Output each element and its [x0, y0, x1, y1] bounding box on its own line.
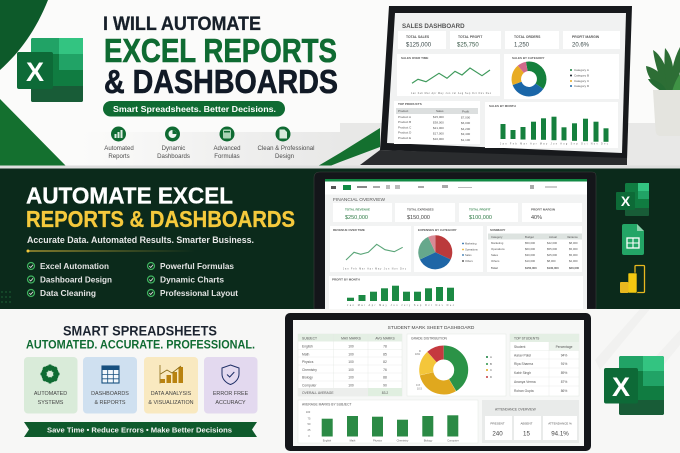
stat: absent: ABSENT — [520, 422, 533, 426]
icon: Excel small: X — [621, 193, 631, 209]
table: summary: $10,000 — [525, 259, 536, 263]
line chart: revenue over time: REVENUE OVER TIME — [333, 228, 365, 232]
feature: dynamic dashboards — [157, 126, 190, 160]
table: summary: Marketing — [491, 241, 504, 245]
icon: gear — [40, 364, 60, 384]
card: data analysis and visualization: DATA ANALYSIS — [151, 391, 192, 397]
icon: Power BI — [620, 266, 644, 293]
table: subject marks: 90 — [383, 384, 387, 388]
donut chart: grade distribution: 10.5 — [417, 388, 422, 390]
icon: Excel logo: X — [26, 57, 44, 87]
table: top products: Product A — [398, 115, 411, 119]
donut chart: grade distribution: D — [419, 350, 421, 353]
KPI: total expenses: $150,000 — [407, 215, 430, 221]
table: subject marks: 100 — [348, 376, 354, 380]
heading: Excel reports: EXCEL REPORTS — [104, 32, 337, 69]
table: top students — [510, 334, 579, 396]
table: top students: Kabir Singh — [514, 371, 531, 375]
table: summary: $30,000 — [525, 253, 536, 257]
table: subject marks: OVERALL AVERAGE — [302, 391, 334, 395]
KPI: profit margin: 20.6% — [572, 42, 590, 48]
table: summary: Variance — [567, 235, 578, 239]
card: automated systems — [24, 357, 78, 414]
bar chart: profit by month: PROFIT BY MONTH — [332, 278, 360, 282]
icon: Excel large — [604, 356, 664, 415]
table: top products: Product — [398, 109, 409, 113]
table: top products: $17,000 — [433, 132, 444, 136]
KPI: total revenue: $250,000 — [345, 215, 368, 221]
table: summary: $60,000 — [525, 247, 536, 251]
table: subject marks: Computer — [302, 384, 317, 388]
card: dashboards and reports — [83, 357, 137, 414]
KPI: total sales — [398, 31, 446, 49]
KPI: profit margin: PROFIT MARGIN — [531, 208, 555, 212]
stat: present — [485, 416, 512, 440]
KPI: total orders: 1,250 — [514, 42, 530, 48]
stat: attendance percentage — [543, 416, 577, 440]
stat: attendance percentage: ATTENDANCE % — [548, 422, 572, 426]
KPI: profit margin — [522, 203, 582, 222]
line chart: revenue over time — [330, 226, 411, 272]
heading: automate excel: AUTOMATE EXCEL — [26, 182, 233, 208]
table: top students: Student — [514, 345, 525, 349]
table: subject marks: 100 — [348, 360, 354, 364]
KPI: total profit: TOTAL PROFIT — [469, 208, 491, 212]
heading: I will automate: I WILL AUTOMATE — [103, 13, 261, 35]
icon: shield — [222, 365, 239, 384]
donut chart: grade distribution: GRADE DISTRIBUTION — [411, 336, 448, 340]
icon: Excel small — [616, 183, 649, 216]
donut chart: grade distribution — [407, 334, 506, 396]
table: summary: Sales — [491, 253, 499, 257]
checklist: right column: Professional Layout — [160, 288, 238, 298]
gold divider — [26, 250, 195, 252]
plant — [646, 47, 680, 136]
table: summary: $50,000 — [525, 241, 536, 245]
stat: absent — [514, 416, 541, 440]
bar chart: average marks by subject: Physics — [373, 438, 383, 442]
laptop: sales dashboard — [360, 6, 632, 165]
KPI: total profit: $100,000 — [469, 215, 492, 221]
table: summary: SUMMARY — [490, 228, 505, 232]
table: summary: $25,000 — [547, 253, 558, 257]
corner shape: bottom centre — [318, 128, 380, 166]
table: subject marks — [298, 334, 402, 396]
feature: automated reports — [104, 126, 134, 160]
card: dashboards and reports: DASHBOARDS — [91, 391, 129, 397]
checklist: right column — [148, 261, 238, 298]
bar chart: average marks by subject: Math — [350, 438, 356, 442]
line chart: sales over time: Jan Feb Mar Apr May Jun Jul Aug Sep Oct Nov Dec — [411, 92, 492, 95]
card: dashboards and reports: & REPORTS — [94, 400, 126, 406]
dashboard title: SALES DASHBOARD — [402, 23, 465, 30]
laptop: financial overview — [314, 172, 596, 309]
table: summary: Total — [491, 266, 498, 270]
table: top products: $21,000 — [433, 126, 444, 130]
table: subject marks: 85 — [383, 352, 387, 356]
table: summary: Budget — [525, 235, 534, 239]
bar chart: sales by month: SALES BY MONTH — [489, 104, 516, 108]
bar chart: average marks by subject: Biology — [424, 438, 433, 442]
decorative tagline pill: Smart Spreadsheets. Better Decisions. — [113, 104, 276, 114]
ribbon: benefits — [24, 422, 257, 437]
table: top products: Product D — [398, 130, 412, 134]
KPI: total profit: $25,750 — [457, 42, 479, 48]
table: summary: Category — [491, 235, 503, 239]
donut chart: sales by category — [504, 54, 619, 99]
table: top students: Percentage — [556, 345, 573, 349]
table: summary: Others — [491, 259, 500, 263]
checklist: left column: Dashboard Design — [40, 274, 112, 284]
heading: smart spreadsheets: SMART SPREADSHEETS — [63, 322, 217, 338]
panel: top banner — [0, 0, 680, 167]
donut chart: sales by category: Category A — [574, 68, 589, 72]
donut chart: sales by category: Category D — [574, 84, 590, 88]
table: top students: 94% — [561, 354, 567, 358]
donut chart: grade distribution: 10% — [415, 353, 421, 356]
KPI: total profit: TOTAL PROFIT — [458, 35, 483, 39]
table: top products: $10,000 — [433, 137, 444, 141]
checklist: left column: Excel Automation — [40, 261, 109, 271]
tagline: Accurate Data. Automated Results. Smarter Business. — [27, 235, 254, 245]
stat: present: 240 — [492, 430, 503, 438]
table: summary: $2,000 — [569, 259, 578, 263]
card: automated systems: SYSTEMS — [38, 400, 64, 406]
table: subject marks: Math — [302, 352, 309, 356]
table: subject marks: 100 — [348, 384, 354, 388]
pie chart: expenses by category: Operations — [465, 248, 478, 252]
donut chart: grade distribution: B — [490, 362, 492, 366]
ribbon: benefits: Save Time • Reduce Errors • Make Better Decisions — [47, 428, 232, 434]
panel: bottom banner — [0, 309, 680, 453]
line chart: sales over time: SALES OVER TIME — [401, 56, 428, 60]
table: top products: $7,000 — [461, 116, 471, 120]
donut chart: grade distribution: D — [490, 375, 492, 379]
donut chart: sales by category: Category B — [574, 74, 589, 78]
card: error free accuracy — [204, 357, 258, 414]
table: top products: Sales — [436, 109, 444, 113]
table: summary — [487, 226, 582, 272]
donut chart: sales by category: Category C — [574, 79, 590, 83]
stat: attendance percentage: 94.1% — [551, 430, 569, 438]
donut chart: grade distribution: C 8 — [416, 384, 420, 387]
dashboard title: STUDENT MARK SHEET DASHBOARD — [388, 325, 475, 331]
table: subject marks: 76 — [383, 368, 387, 372]
table: summary: $20,000 — [569, 266, 580, 270]
decorative dots — [1, 291, 11, 303]
table: top products: $15,000 — [433, 115, 444, 119]
KPI: total expenses: TOTAL EXPENSES — [407, 208, 434, 212]
table: subject marks: 82 — [383, 360, 387, 364]
table: subject marks: 83.2 — [382, 391, 388, 395]
card: data analysis and visualization: & VISUALIZATION — [148, 400, 194, 406]
dashboard title: FINANCIAL OVERVIEW — [333, 197, 385, 203]
table: subject marks: 88 — [383, 376, 387, 380]
table: subject marks: 78 — [383, 344, 387, 348]
KPI: profit margin — [563, 31, 620, 49]
table: top products: Product E — [398, 136, 411, 140]
card: error free accuracy: ACCURACY — [215, 400, 246, 406]
table: top students: 91% — [561, 362, 567, 366]
feature: clean and professional design: Clean & Professional — [258, 145, 314, 152]
donut chart: grade distribution: A — [490, 355, 492, 359]
attendance overview — [482, 400, 579, 443]
table: subject marks: Biology — [302, 376, 313, 380]
bar chart: profit by month — [329, 276, 583, 309]
KPI: total expenses — [395, 203, 455, 222]
attendance overview: ATTENDANCE OVERVIEW — [495, 408, 537, 412]
table: subject marks: English — [302, 344, 313, 348]
table: summary: Operations — [491, 247, 505, 251]
table: top products: Profit — [462, 110, 469, 114]
pie chart: expenses by category: Marketing — [465, 242, 477, 246]
table: top students: 87% — [561, 380, 567, 384]
pie chart: expenses by category: Sales — [465, 253, 472, 257]
feature: clean and professional design: Design — [275, 153, 294, 160]
bar chart: average marks by subject: Computer — [447, 438, 459, 442]
heading: dashboards: & DASHBOARDS — [104, 63, 338, 100]
checklist: right column: Powerful Formulas — [160, 261, 234, 271]
table: subject marks: MAX MARKS — [341, 336, 362, 340]
table: summary: $8,000 — [547, 259, 556, 263]
line chart: revenue over time: Jan Feb Mar Apr May Jun Nov Dec — [343, 268, 407, 270]
checklist: left column: Data Cleaning — [40, 288, 96, 298]
decorative tagline pill — [103, 101, 285, 116]
panel: middle banner — [0, 166, 680, 309]
feature: advanced formulas: Formulas — [214, 153, 240, 160]
corner shape: bottom left — [0, 99, 66, 166]
feature: dynamic dashboards: Dashboards — [157, 153, 190, 160]
table: top students: Rohan Gupta — [514, 389, 534, 393]
table: subject marks: Physics — [302, 360, 314, 364]
stat: absent: 15 — [523, 430, 530, 438]
table: top students: 89% — [561, 371, 567, 375]
checklist: right column: Dynamic Charts — [160, 274, 224, 284]
bar chart: sales by month: Jan Feb Mar Apr May Jun Aug Sep Oct Nov Dec — [500, 142, 609, 146]
table: subject marks: 100 — [348, 344, 354, 348]
line chart: sales over time — [397, 54, 500, 96]
KPI: profit margin: 40% — [531, 215, 542, 221]
pie chart: expenses by category: EXPENSES BY CATEGORY — [418, 228, 457, 232]
feature: advanced formulas: Advanced — [213, 145, 241, 152]
icon: Excel large: X — [612, 372, 630, 402]
card: error free accuracy: ERROR FREE — [213, 391, 249, 397]
table: summary: $55,000 — [547, 247, 558, 251]
feature: clean and professional design — [258, 126, 314, 160]
table: top students: TOP STUDENTS — [514, 336, 540, 340]
table: top products: TOP PRODUCTS — [398, 102, 422, 106]
table: subject marks: 100 — [348, 368, 354, 372]
table: top products: $1,100 — [461, 138, 471, 142]
KPI: total sales: TOTAL SALES — [406, 35, 430, 39]
plant pot — [653, 90, 680, 136]
KPI: total orders: TOTAL ORDERS — [514, 35, 541, 39]
table: subject marks: AVG MARKS — [375, 336, 395, 340]
table: summary: $42,000 — [547, 241, 558, 245]
table: subject marks: 100 — [348, 352, 354, 356]
KPI: total profit — [459, 203, 518, 222]
table: summary: $150,000 — [525, 266, 537, 270]
table: top students: Riya Sharma — [514, 362, 533, 366]
pie chart: expenses by category: Others — [465, 259, 473, 263]
table: top products: Product C — [398, 126, 412, 130]
icon: Google Sheets — [622, 224, 644, 255]
bar chart: average marks by subject: English — [323, 438, 332, 442]
bar chart: average marks by subject: 25 — [308, 428, 311, 432]
KPI: total orders — [505, 31, 559, 49]
card: automated systems: AUTOMATED — [34, 391, 67, 397]
table: top products — [394, 101, 480, 144]
card: data analysis and visualization — [144, 357, 198, 414]
KPI: total profit — [450, 31, 501, 49]
bar chart: average marks by subject: 100 — [306, 410, 311, 414]
subheading: automated accurate professional: AUTOMATED. ACCURATE. PROFESSIONAL. — [26, 340, 255, 352]
background streaks — [595, 309, 680, 400]
table: top products: $3,400 — [461, 132, 471, 136]
table: summary: $5,000 — [569, 247, 578, 251]
bar chart: sales by month — [485, 102, 618, 148]
bar chart: average marks by subject: Chemistry — [397, 438, 409, 442]
KPI: total revenue: TOTAL REVENUE — [345, 208, 370, 212]
table: top students: Ananya Verma — [514, 380, 536, 384]
table: summary: $130,000 — [547, 266, 559, 270]
feature: automated reports: Reports — [108, 153, 130, 160]
laptop: student mark sheet — [285, 313, 591, 451]
table: summary: $8,000 — [569, 241, 578, 245]
donut chart: sales by category: SALES BY CATEGORY — [512, 56, 544, 60]
table: top products: Product B — [398, 120, 411, 124]
checklist: left column — [28, 261, 112, 298]
table: summary: $5,000 — [569, 253, 578, 257]
bar chart: average marks by subject: 50 — [308, 422, 311, 426]
bar chart: profit by month: Jan Mar Apr May Jun July Sep Oct Nov Dec — [347, 304, 455, 307]
heading: reports and dashboards: REPORTS & DASHBOARDS — [26, 206, 295, 232]
table: top products: $4,200 — [461, 127, 471, 131]
donut chart: grade distribution: C — [490, 368, 492, 372]
feature: automated reports: Automated — [104, 145, 134, 152]
icon: table — [102, 366, 119, 383]
KPI: total sales: $125,000 — [406, 42, 432, 48]
bar chart: average marks by subject: 75 — [308, 416, 311, 420]
table: top students: Aarav Patel — [514, 354, 531, 358]
table: subject marks: Chemistry — [302, 368, 317, 372]
icon: Excel logo — [17, 38, 83, 102]
stat: present: PRESENT — [490, 422, 505, 426]
corner shape: top left — [0, 0, 48, 70]
bar chart: average marks by subject: AVERAGE MARKS BY SUBJECT — [302, 402, 352, 406]
table: summary: Actual — [549, 235, 557, 239]
table: top students: 86% — [561, 389, 567, 393]
feature: dynamic dashboards: Dynamic — [162, 145, 185, 152]
table: subject marks: SUBJECT — [302, 336, 317, 340]
bar chart: average marks by subject: 0 — [308, 434, 310, 438]
spreadsheet ribbon — [325, 182, 587, 194]
icon: rising bars — [160, 365, 183, 384]
table: top products: $38,000 — [433, 120, 444, 124]
pie chart: expenses by category — [414, 226, 483, 272]
table: top products: $6,000 — [461, 121, 471, 125]
bar chart: average marks by subject — [298, 400, 478, 443]
feature: advanced formulas — [213, 126, 241, 160]
KPI: total revenue — [333, 203, 392, 222]
KPI: profit margin: PROFIT MARGIN — [572, 35, 600, 39]
